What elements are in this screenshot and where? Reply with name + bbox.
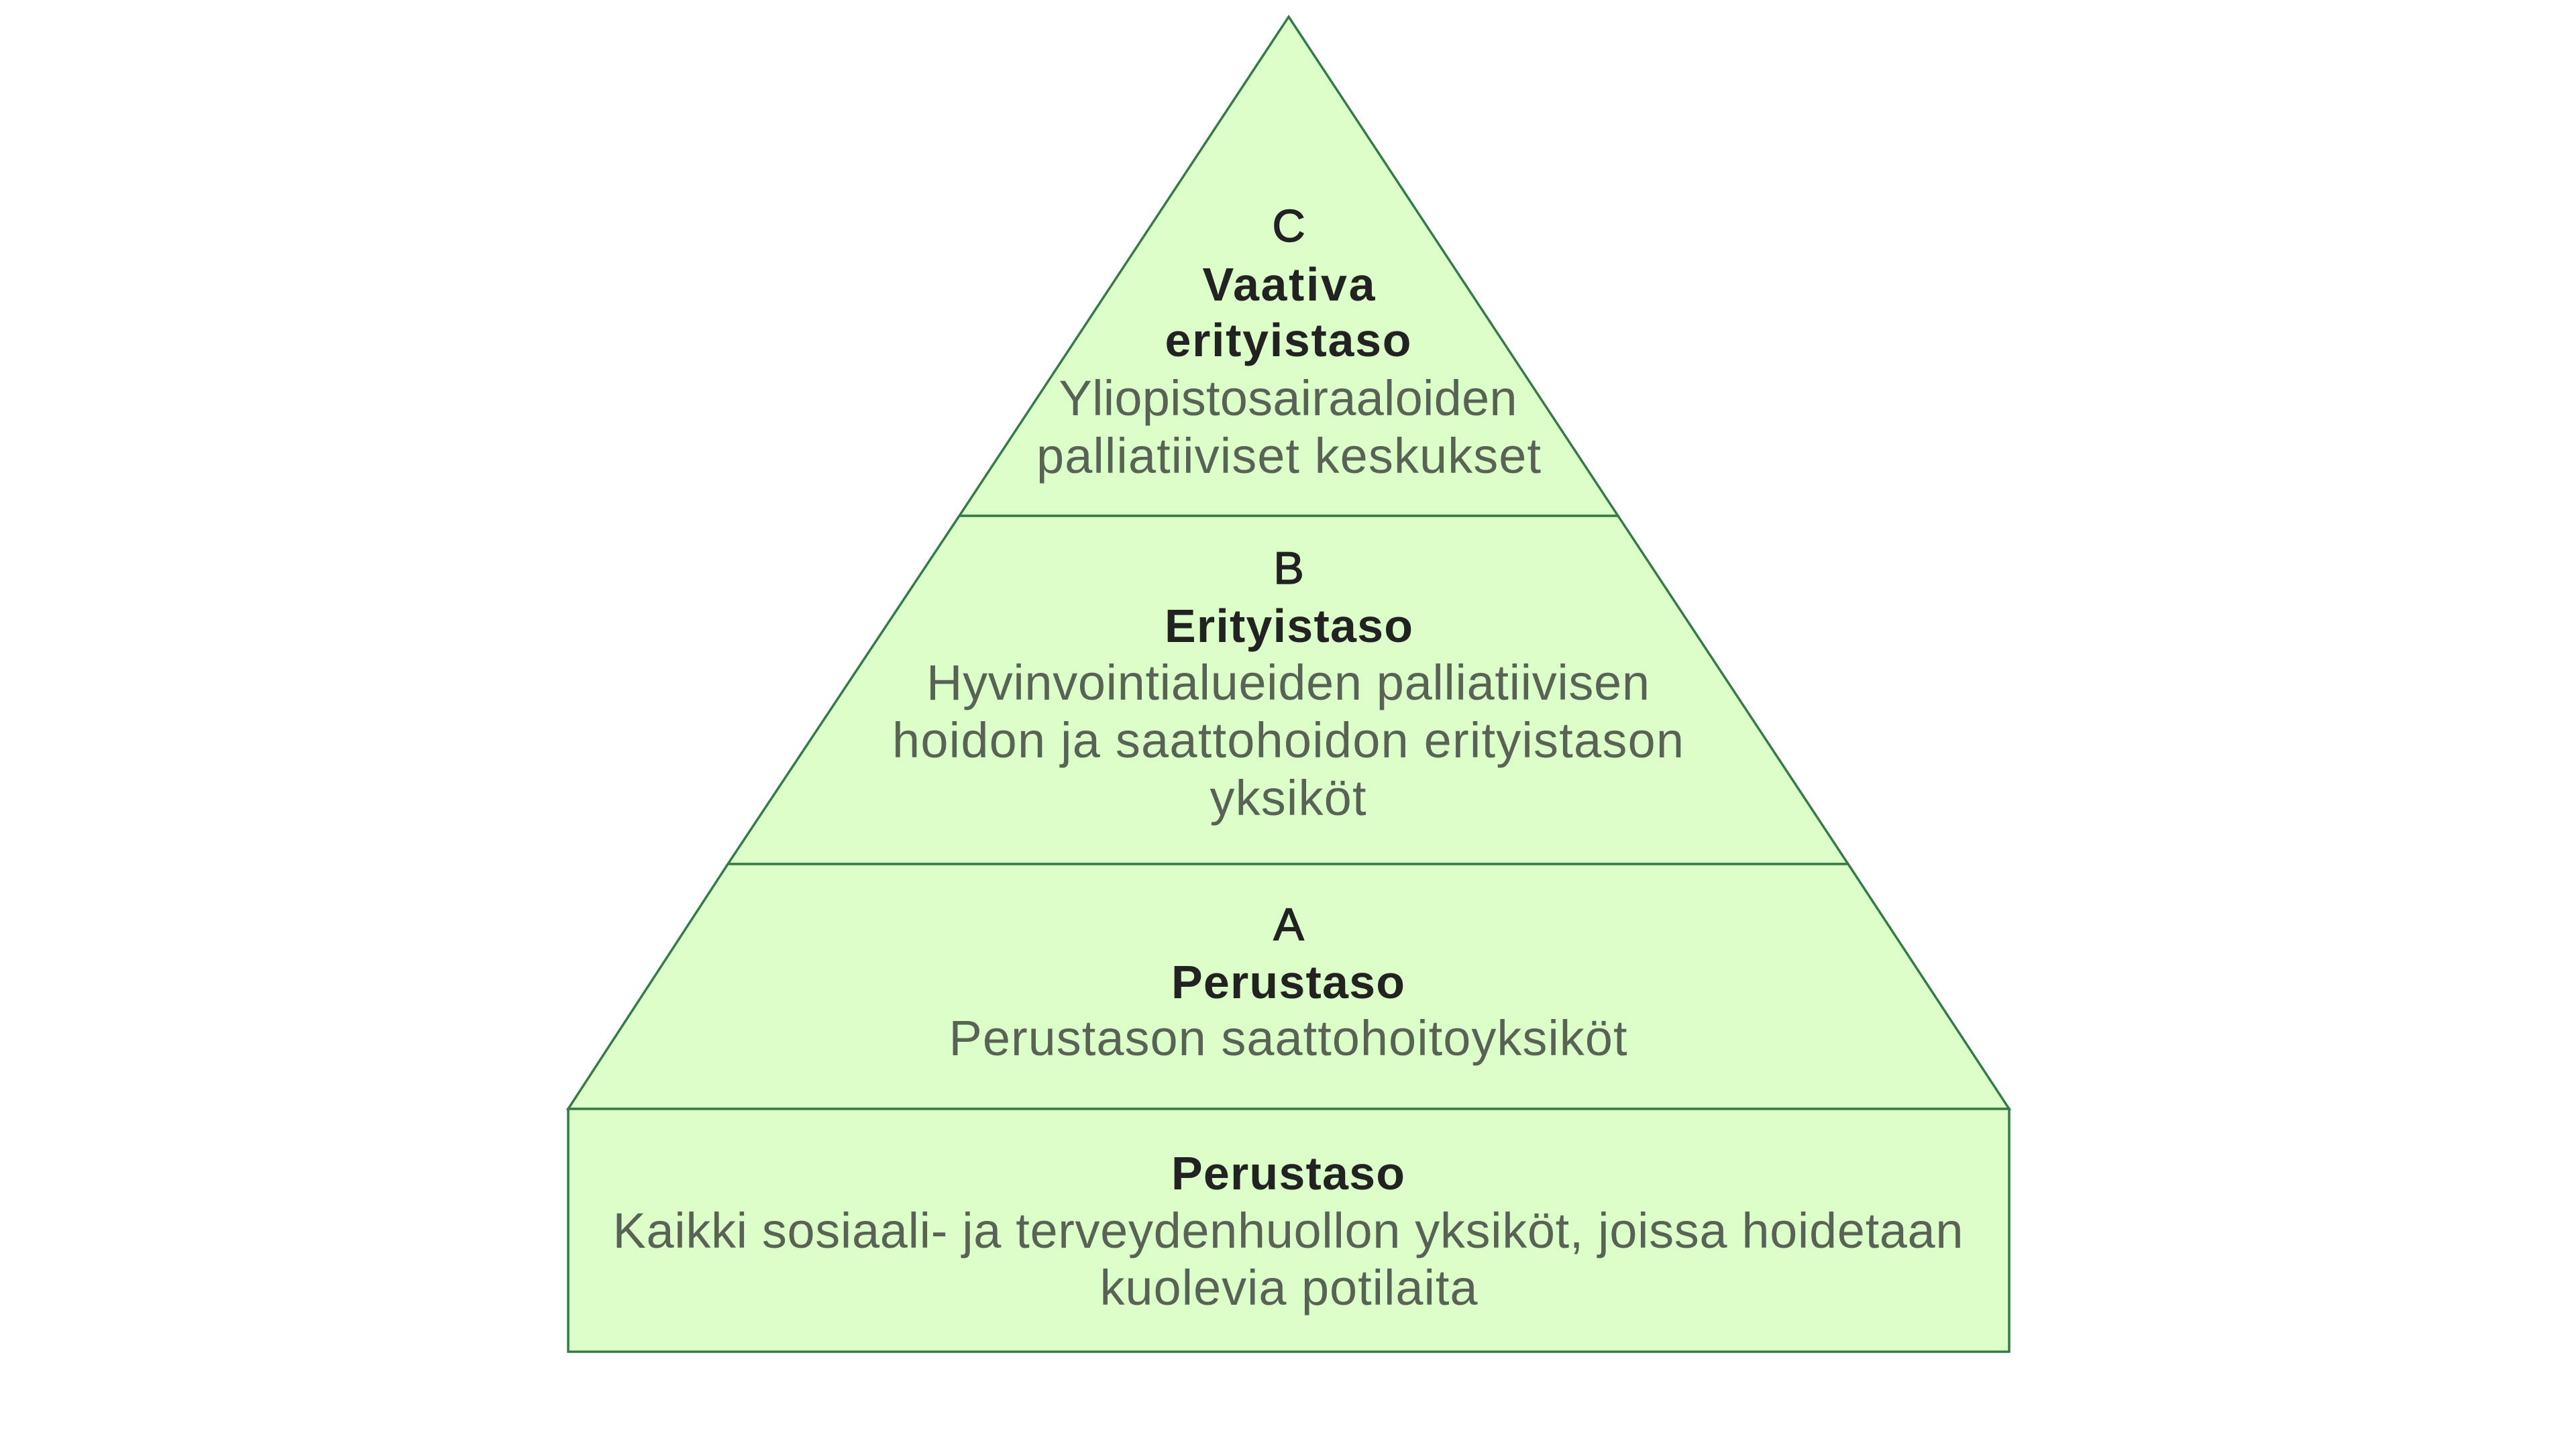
panel: level B	[728, 516, 1848, 864]
panel: level C	[959, 17, 1618, 516]
heading: A: A	[1273, 899, 1304, 950]
heading: Vaativa erityistaso: Vaativa	[1202, 258, 1376, 311]
panel: base level	[568, 1109, 2009, 1352]
text: B description: yksiköt	[1210, 770, 1366, 826]
heading: Vaativa erityistaso: erityistaso	[1165, 314, 1411, 366]
text: base description: kuolevia potilaita	[1100, 1260, 1478, 1316]
text: base description	[613, 1203, 1963, 1316]
text: base description: Kaikki sosiaali- ja terveydenhuollon yksiköt, joissa hoidetaan	[613, 1203, 1963, 1258]
text: B description: hoidon ja saattohoidon erityistason	[892, 712, 1684, 768]
heading: C: C	[1272, 201, 1305, 252]
heading: B: B	[1273, 543, 1304, 594]
text: C description	[1036, 370, 1541, 484]
text: B description: Hyvinvointialueiden palliatiivisen	[926, 655, 1650, 710]
panel: level A	[568, 864, 2009, 1109]
text: B description	[892, 655, 1684, 826]
text: A description: Perustason saattohoitoyksiköt	[949, 1010, 1627, 1066]
heading: Perustaso: Perustaso	[1171, 956, 1405, 1008]
heading: Perustaso base: Perustaso	[1171, 1147, 1405, 1199]
text: C description: palliatiiviset keskukset	[1036, 428, 1541, 484]
heading: Erityistaso: Erityistaso	[1165, 600, 1413, 652]
heading: Vaativa erityistaso	[1165, 258, 1411, 366]
text: C description: Yliopistosairaaloiden	[1059, 370, 1517, 426]
